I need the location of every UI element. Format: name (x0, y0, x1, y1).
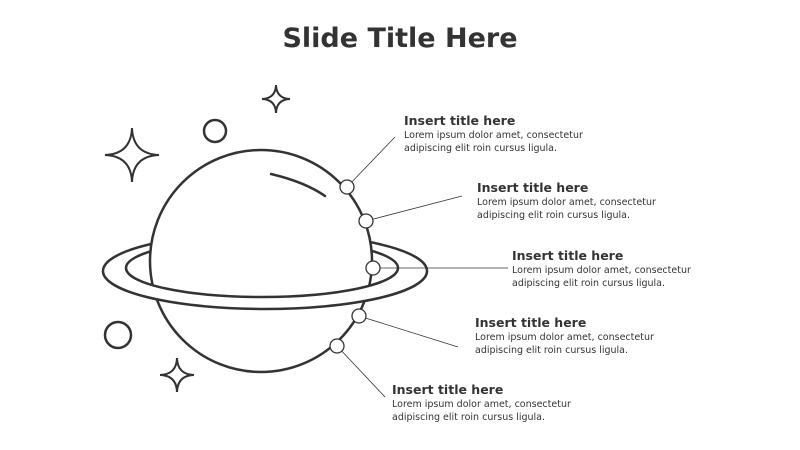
markers (330, 180, 380, 353)
text block 3 (512, 248, 691, 289)
text block 2 (477, 180, 656, 221)
star small bottom (160, 358, 194, 392)
text block 4: Insert title here (475, 315, 586, 330)
text block 2: adipiscing elit roin cursus ligula. (477, 210, 630, 221)
ring front (103, 268, 427, 309)
text block 2: Lorem ipsum dolor amet, consectetur (477, 197, 656, 208)
text block 1 (404, 113, 583, 154)
text block 3: adipiscing elit roin cursus ligula. (512, 278, 665, 289)
text block 4: adipiscing elit roin cursus ligula. (475, 345, 628, 356)
text block 1: adipiscing elit roin cursus ligula. (404, 143, 557, 154)
title: Slide Title Here (282, 23, 518, 54)
star small top (262, 85, 290, 113)
text block 4 (475, 315, 654, 356)
text block 5: adipiscing elit roin cursus ligula. (392, 412, 545, 423)
text block 5: Insert title here (392, 382, 503, 397)
text block 5 (392, 382, 571, 423)
text block 1: Insert title here (404, 113, 515, 128)
circles (204, 120, 226, 142)
text block 2: Insert title here (477, 180, 588, 195)
planet body (150, 150, 372, 372)
star large (105, 128, 159, 182)
connectors (337, 137, 508, 397)
text block 3: Lorem ipsum dolor amet, consectetur (512, 265, 691, 276)
text block 3: Insert title here (512, 248, 623, 263)
text block 4: Lorem ipsum dolor amet, consectetur (475, 332, 654, 343)
text block 5: Lorem ipsum dolor amet, consectetur (392, 399, 571, 410)
ring back (103, 233, 427, 309)
text block 1: Lorem ipsum dolor amet, consectetur (404, 130, 583, 141)
